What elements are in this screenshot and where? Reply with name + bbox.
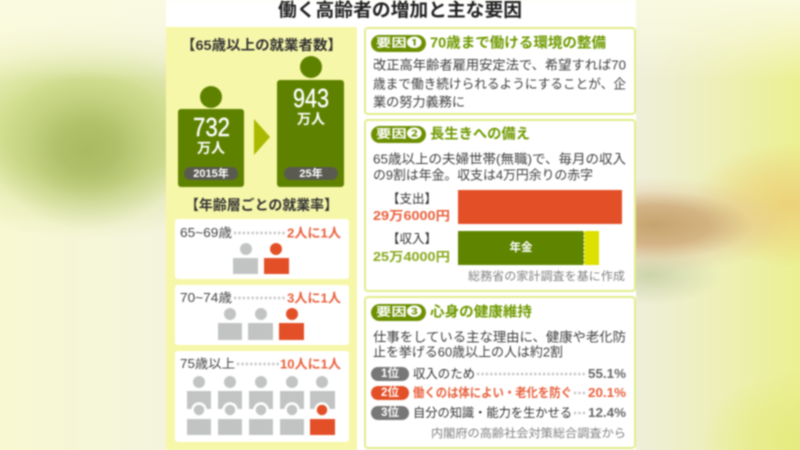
ranking list: 働くのは体によい・老化を防ぐ [413,385,572,400]
factor 2 badge [371,126,426,143]
bar chart: spending and income: 【支出】 [387,192,437,206]
card: age 65-69: 65~69歳 [180,226,233,240]
factor 3 source: 内閣府の高齢社会対策総合調査から [431,426,626,440]
factor 1 text: 改正高年齢者雇用安定法で、希望すれば70 [373,56,626,72]
factor 2 text [373,150,626,182]
ranking list: 55.1% [588,367,626,381]
card: age 75+: 75歳以上 [180,357,235,371]
factor 3 text: 仕事をしている主な理由に、健康や老化防 [373,330,626,344]
factor 1 badge: 要因❶ [376,36,423,50]
ranking list: 3位 [381,405,399,419]
card: age 70-74: 70~74歳 [180,291,233,305]
bar chart: spending and income: 年金 [510,240,533,254]
bar chart: spending and income: 29万6000円 [373,209,450,223]
figure: 2015 workers: 万人 [197,140,225,156]
factor 3 badge [371,304,426,321]
factor 3 text: 止を挙げる60歳以上の人は約2割 [373,344,563,360]
factor 2 badge: 要因❷ [376,128,423,140]
ranking list: 自分の知識・能力を生かせる [413,405,572,420]
factor 3 heading: 心身の健康維持 [430,302,532,320]
factor 3 text [373,330,626,360]
card: age 70-74: 3人に1人 [287,290,341,306]
panel: factor 2 [365,120,635,291]
figure: 2015 workers [178,86,244,187]
ranking list [371,366,626,420]
figure: 2025 workers: 万人 [297,111,325,127]
factor 2 text: 65歳以上の夫婦世帯(無職)で、毎月の収入 [373,150,626,166]
ranking list: 2位 [381,385,399,399]
bar chart: spending and income [373,190,622,265]
factor 1 text [373,56,626,110]
heading: workers aged 65+: 【65歳以上の就業者数】 [181,37,342,53]
factor 2 source: 総務省の家計調査を基に作成 [468,269,626,283]
panel: left column [166,27,357,450]
ranking list: 12.4% [588,406,626,420]
card: age 75+ [175,351,349,442]
bar chart: spending and income: 【収入】 [387,232,437,246]
factor 3 badge: 要因❸ [376,306,423,318]
factor 2 text: の9割は年金。収支は4万円余りの赤字 [373,168,593,182]
ranking list: 20.1% [588,386,626,400]
ranking list: 1位 [381,366,399,380]
factor 1 heading: 70歳まで働ける環境の整備 [430,34,606,52]
panel: factor 3 [365,297,635,448]
figure: 2025 workers: 943 [293,83,329,113]
card: age 65-69: 2人に1人 [287,226,341,240]
figure: 2015 workers: 2015年 [193,166,229,180]
figure: 2025 workers: 25年 [299,166,323,180]
ranking list: 収入のため [413,367,475,381]
white sheet [166,0,636,450]
heading: employment rate by age: 【年齢層ごとの就業率】 [185,197,338,213]
arrow [254,119,270,155]
panel: factor 1 [365,28,635,114]
title: 働く高齢者の増加と主な要因 [278,0,522,20]
factor 1 text: 業の努力義務に [373,94,465,110]
figure: 2025 workers [277,56,344,187]
factor 1 badge [371,35,426,52]
figure: 2015 workers: 732 [193,112,230,142]
factor 2 heading: 長生きへの備え [430,126,530,142]
card: age 75+: 10人に1人 [280,356,341,372]
card: age 70-74 [175,285,349,345]
card: age 65-69 [175,219,349,279]
factor 1 text: 歳まで働き続けられるようにすることが、企 [373,76,626,92]
bar chart: spending and income: 25万4000円 [373,250,450,264]
